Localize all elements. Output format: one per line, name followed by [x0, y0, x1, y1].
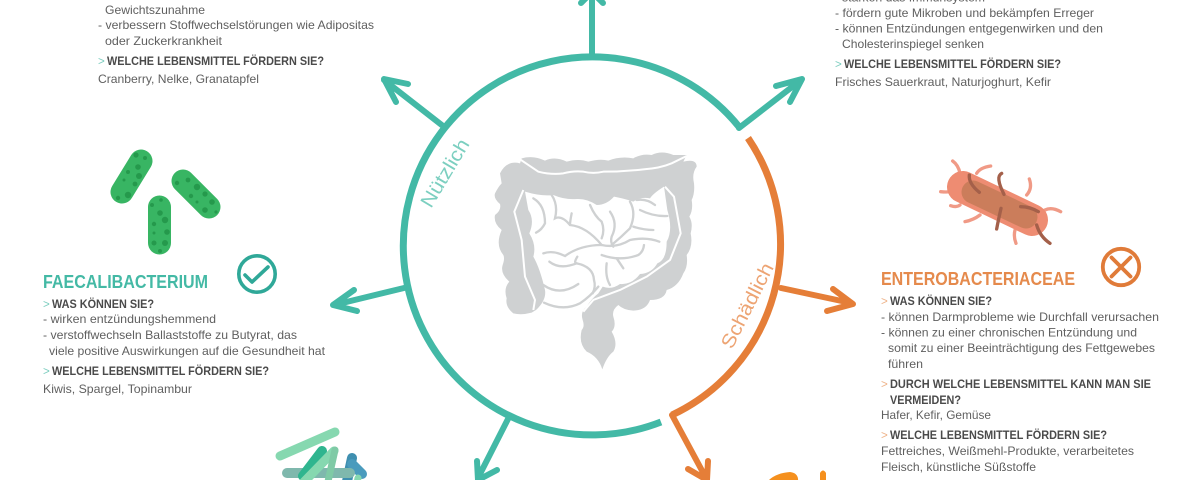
panel: upper right bacterium text: >: [835, 58, 842, 71]
icon: orange bacterium, cropped at the bottom edge: [767, 470, 826, 480]
panel: upper left bacterium text: Cranberry, Nelke, Granatapfel: [98, 72, 259, 86]
panel: Enterobacteriaceae: führen: [888, 357, 923, 371]
arrow: up: [581, 0, 603, 54]
icon: rod bacteria cluster: [280, 432, 362, 480]
panel: upper left bacterium text: oder Zuckerkrankheit: [105, 34, 223, 48]
arrow: lower right: [672, 415, 708, 480]
panel: upper right bacterium text: WELCHE LEBENSMITTEL FÖRDERN SIE?: [844, 58, 1061, 71]
panel: Faecalibacterium: Kiwis, Spargel, Topinambur: [43, 382, 192, 396]
arrow: lower left: [477, 417, 509, 480]
panel: upper left bacterium text: Gewichtszunahme: [105, 3, 205, 17]
heading: Enterobacteriaceae: ENTEROBACTERIACEAE: [881, 269, 1075, 289]
panel: Enterobacteriaceae: WAS KÖNNEN SIE?: [890, 295, 992, 308]
icon: check circle: [239, 256, 275, 292]
panel: upper right bacterium text: - fördern gute Mikroben und bekämpfen Erreger: [835, 6, 1094, 20]
arrow: upper right: [739, 79, 802, 128]
panel: Enterobacteriaceae: [881, 269, 1159, 474]
panel: Faecalibacterium: >: [43, 365, 50, 378]
panel: Faecalibacterium: - verstoffwechseln Ballaststoffe zu Butyrat, das: [43, 328, 297, 342]
arrow: left: [333, 288, 404, 311]
panel: Enterobacteriaceae: DURCH WELCHE LEBENSMITTEL KANN MAN SIE: [890, 378, 1151, 391]
panel: Faecalibacterium: WELCHE LEBENSMITTEL FÖRDERN SIE?: [52, 365, 269, 378]
label: Nützlich: Nützlich: [416, 135, 474, 212]
panel: upper right bacterium text: [835, 0, 1103, 89]
panel: Faecalibacterium: >: [43, 298, 50, 311]
panel: Faecalibacterium: [43, 272, 326, 396]
panel: upper right bacterium text: Cholesterinspiegel senken: [842, 37, 984, 51]
harmful arc and arrows: [672, 138, 853, 480]
circle diagram: beneficial arc and arrows: [333, 0, 802, 480]
panel: Enterobacteriaceae: WELCHE LEBENSMITTEL FÖRDERN SIE?: [890, 429, 1107, 442]
panel: Enterobacteriaceae: Hafer, Kefir, Gemüse: [881, 408, 991, 422]
panel: Enterobacteriaceae: >: [881, 429, 888, 442]
panel: Enterobacteriaceae: - können zu einer chronischen Entzündung und: [881, 326, 1137, 340]
panel: Enterobacteriaceae: Fleisch, künstliche Süßstoffe: [881, 460, 1036, 474]
panel: upper left bacterium text: - verbessern Stoffwechselstörungen wie Adipositas: [98, 18, 374, 32]
panel: Faecalibacterium: - wirken entzündungshemmend: [43, 312, 216, 326]
panel: Enterobacteriaceae: Fettreiches, Weißmehl-Produkte, verarbeitetes: [881, 444, 1134, 458]
icon: salmon bacterium: [941, 161, 1061, 243]
heading: Faecalibacterium: FAECALIBACTERIUM: [43, 272, 208, 292]
icon: green bacteria: [116, 152, 218, 253]
icon: cross circle: [1103, 249, 1139, 285]
panel: upper right bacterium text: - können Entzündungen entgegenwirken und den: [835, 22, 1103, 36]
panel: Faecalibacterium: viele positive Auswirkungen auf die Gesundheit hat: [49, 344, 326, 358]
panel: Faecalibacterium: WAS KÖNNEN SIE?: [52, 298, 154, 311]
panel: Enterobacteriaceae: VERMEIDEN?: [890, 394, 961, 407]
orange ring arc: [672, 138, 781, 415]
teal ring arc: [403, 57, 740, 435]
arrow: upper left: [384, 79, 443, 126]
panel: Enterobacteriaceae: >: [881, 295, 888, 308]
arrow: right: [781, 288, 853, 311]
label: Schädlich: Schädlich: [717, 259, 779, 352]
panel: upper left bacterium text: >: [98, 55, 105, 68]
panel: upper right bacterium text: Frisches Sauerkraut, Naturjoghurt, Kefir: [835, 75, 1051, 89]
panel: Enterobacteriaceae: >: [881, 378, 888, 391]
icon: intestine: [495, 152, 697, 369]
panel: upper left bacterium text: WELCHE LEBENSMITTEL FÖRDERN SIE?: [107, 55, 324, 68]
panel: Enterobacteriaceae: somit zu einer Beeinträchtigung des Fettgewebes: [888, 341, 1155, 355]
panel: upper left bacterium text: [98, 3, 374, 86]
panel: Enterobacteriaceae: - können Darmprobleme wie Durchfall verursachen: [881, 310, 1159, 324]
